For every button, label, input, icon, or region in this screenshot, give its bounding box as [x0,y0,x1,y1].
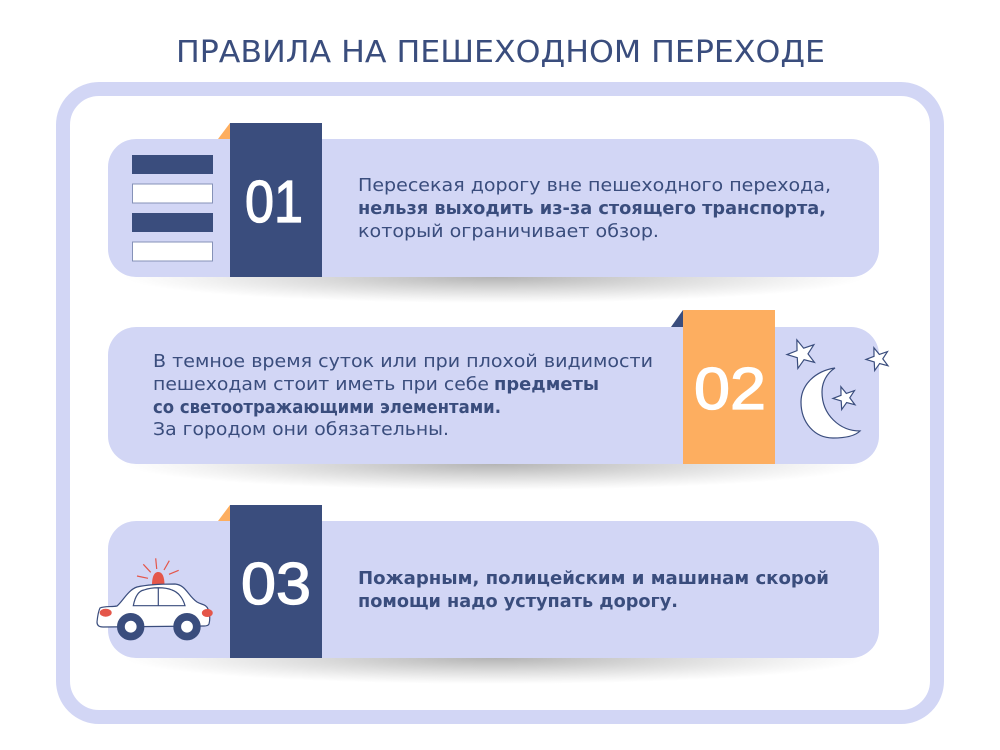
number tab 03 [230,505,322,658]
icon: moon and stars [783,335,892,438]
text block 01: нельзя выходить из-за стоящего транспорта, [358,199,826,219]
number tab 01 [230,123,322,277]
number 03: 03 [241,551,311,617]
text block 01: Пересекая дорогу вне пешеходного перехода, [358,175,831,196]
card shadow 01 [125,251,865,303]
text block 02: предметы [494,375,599,395]
card shadow 02 [125,438,865,490]
text block 02 [153,351,653,440]
text block 03: Пожарным, полицейским и машинам скорой [358,569,829,589]
number tab 02 [683,310,775,464]
card background 02 [108,327,879,464]
icon: crosswalk stripes [132,155,213,261]
text block 02: пешеходам стоит иметь при себе [153,374,489,395]
title: ПРАВИЛА НА ПЕШЕХОДНОМ ПЕРЕХОДЕ [176,35,825,70]
card background 03 [108,521,879,658]
text block 02: За городом они обязательны. [153,419,449,440]
number 01: 01 [245,169,303,235]
card background 01 [108,139,879,277]
tab fold 01 [218,123,230,139]
text block 02: со светоотражающими элементами. [153,398,501,418]
text block 01: который ограничивает обзор. [358,221,659,242]
panel: rule 01 [108,123,879,303]
card shadow 03 [125,632,865,684]
text block 03: помощи надо уступать дорогу. [358,592,678,612]
panel: rule 02 [108,310,892,490]
number 02: 02 [694,356,766,422]
text block 01 [358,175,831,242]
icon: emergency car [97,558,213,636]
tab fold 03 [218,505,230,521]
text block 03 [358,569,829,612]
tab fold 02 [671,310,683,327]
panel: rule 03 [97,505,879,684]
text block 02: В темное время суток или при плохой видимости [153,351,653,372]
outer frame panel [63,89,937,717]
